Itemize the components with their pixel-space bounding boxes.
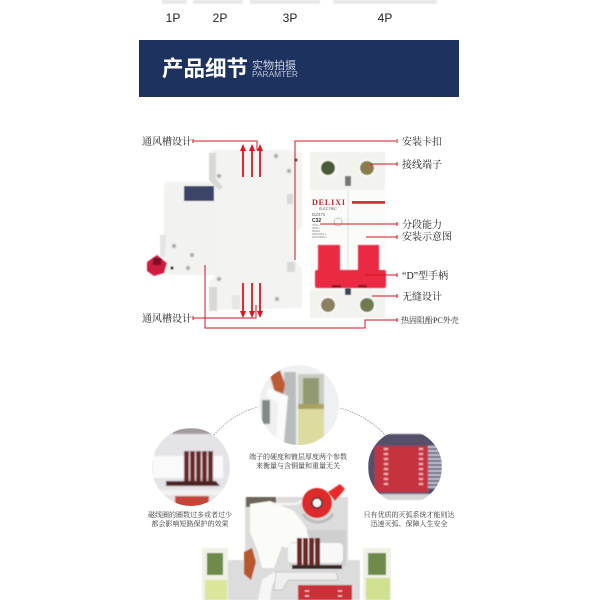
front view breaker bbox=[310, 152, 385, 318]
toggle handle bbox=[147, 235, 167, 276]
brand and ratings bbox=[312, 198, 385, 239]
spec text: 400V~ bbox=[312, 226, 321, 230]
plate bbox=[160, 490, 222, 495]
up arrows bbox=[240, 144, 263, 177]
caption: terminal: 端子的硬度和镀层厚度两个参数 bbox=[249, 452, 347, 461]
caption: arc chute: 迅速灭弧、保障人生安全 bbox=[370, 519, 448, 528]
top shade bbox=[172, 428, 212, 434]
inner cavity bbox=[290, 530, 346, 566]
grid plates bbox=[428, 447, 442, 487]
spec text: 6000A bbox=[312, 229, 320, 233]
banner title: 产品细节 bbox=[162, 57, 248, 81]
coil leads bbox=[166, 481, 220, 486]
red stripe bbox=[352, 201, 385, 204]
label: breaking capacity: 分段能力 bbox=[402, 218, 442, 231]
right terminal bbox=[363, 548, 391, 600]
brand subline: ELECTRIC bbox=[319, 207, 337, 211]
cutaway breaker bbox=[202, 484, 391, 600]
label: D handle: “D”型手柄 bbox=[402, 269, 448, 282]
link wire bbox=[270, 499, 309, 504]
top product strip bbox=[162, 0, 437, 25]
spec text: IEC60898-1 bbox=[312, 235, 327, 239]
banner english subtitle: PARAMTER bbox=[252, 69, 298, 79]
coil windings bbox=[297, 538, 320, 567]
side body upper bbox=[209, 150, 302, 310]
pole labels bbox=[166, 11, 392, 25]
certification mark bbox=[334, 218, 342, 226]
dashed connector left bbox=[214, 407, 258, 435]
pole labels: 3P bbox=[283, 11, 297, 25]
banner background bbox=[139, 40, 459, 97]
red arc chute bbox=[298, 585, 352, 600]
vent arrows bbox=[240, 144, 263, 318]
white conductor bbox=[266, 388, 288, 442]
dots bbox=[294, 158, 298, 162]
leader lines bbox=[193, 139, 397, 328]
label: PC shell: 热固阻酚PC外壳 bbox=[401, 315, 459, 325]
coil core bbox=[288, 543, 343, 563]
clip slots bbox=[209, 153, 295, 311]
red chute bbox=[375, 446, 428, 492]
down arrows bbox=[240, 283, 263, 318]
terminals bbox=[319, 159, 376, 314]
red dial bbox=[302, 484, 345, 522]
section banner bbox=[139, 40, 459, 97]
copper strip bbox=[244, 548, 256, 580]
top dark slot bbox=[246, 497, 276, 507]
terminal cage bbox=[298, 374, 324, 405]
coil windings bbox=[184, 451, 213, 485]
side view breaker bbox=[147, 150, 302, 311]
spec text: GB10963.1 bbox=[312, 232, 327, 236]
red toggle bbox=[315, 245, 386, 288]
right detail circle: arc chute bbox=[368, 434, 442, 500]
lower plate bbox=[368, 494, 442, 500]
label: clip: 安装卡扣 bbox=[402, 135, 442, 148]
circle background bbox=[368, 434, 442, 500]
callout labels bbox=[142, 135, 459, 325]
lower white frame bbox=[258, 572, 278, 600]
model: DZ47s bbox=[312, 212, 326, 217]
pole labels: 2P bbox=[213, 11, 227, 25]
status window bbox=[184, 186, 214, 201]
silver lever bbox=[274, 572, 338, 590]
side body front bbox=[164, 182, 218, 275]
circle background bbox=[259, 365, 339, 446]
front body bbox=[310, 152, 385, 318]
banner subtitle: 实物拍摄 bbox=[252, 58, 296, 72]
caption: coil: 都会影响短路保护的效果 bbox=[152, 519, 228, 528]
rating: C32 bbox=[312, 218, 321, 224]
spec text: 230V~ bbox=[312, 223, 321, 227]
brand name: DELIXI bbox=[312, 198, 345, 207]
copper strip bbox=[270, 370, 286, 395]
red block bbox=[175, 496, 209, 507]
screws bbox=[172, 154, 292, 302]
caption: terminal: 来衡量与含铜量和重量无关 bbox=[256, 461, 340, 470]
coil base bbox=[292, 565, 342, 569]
left terminal bbox=[202, 548, 228, 600]
label: terminal: 接线端子 bbox=[402, 158, 442, 171]
dashed connector right bbox=[340, 408, 387, 437]
housing wall bbox=[284, 372, 296, 446]
caption: coil bbox=[148, 510, 232, 528]
label: diagram: 安装示意图 bbox=[402, 230, 452, 243]
spec text bbox=[312, 223, 327, 239]
front label panel bbox=[310, 190, 385, 290]
pole labels: 1P bbox=[166, 11, 180, 25]
housing bbox=[228, 497, 360, 600]
center detail circle: terminal bbox=[259, 365, 339, 446]
caption: coil: 磁线圈的圈数过多或者过少 bbox=[148, 510, 232, 519]
pole labels: 4P bbox=[378, 11, 392, 25]
white mechanism bbox=[250, 501, 310, 568]
caption: terminal bbox=[249, 452, 347, 470]
caption: arc chute: 只有优质的灭弧系统才能则达 bbox=[364, 510, 454, 519]
center clip bbox=[345, 176, 351, 186]
panel divider bbox=[348, 190, 349, 270]
left detail circle: coil bbox=[152, 428, 230, 507]
circle background bbox=[152, 433, 230, 503]
breaker thumbnails bbox=[162, 0, 437, 4]
caption: arc chute bbox=[364, 510, 454, 528]
core bbox=[153, 456, 223, 478]
white slots bbox=[384, 449, 423, 484]
label: seamless: 无缝设计 bbox=[402, 290, 442, 303]
label: vent bottom: 通风槽设计 bbox=[142, 312, 192, 325]
label: vent top: 通风槽设计 bbox=[142, 135, 192, 148]
